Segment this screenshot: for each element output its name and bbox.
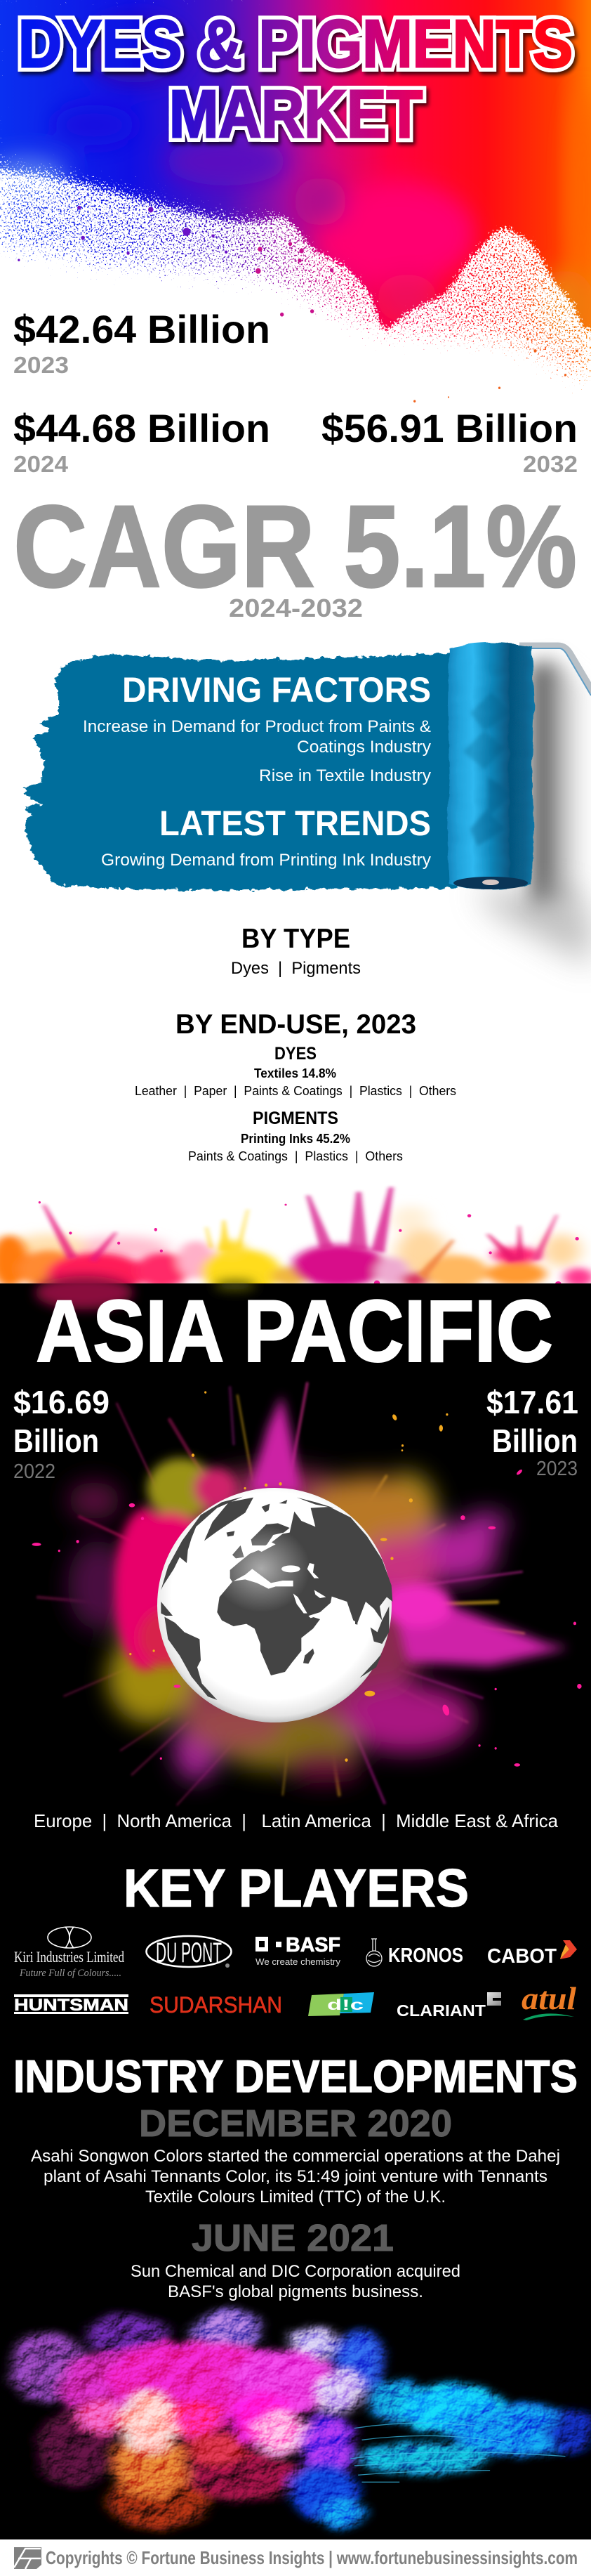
dyes segment [135,1044,456,1098]
pigments segment: Printing Inks 45.2% [241,1132,350,1146]
by end-use [135,1009,456,1163]
logo: Cabot [487,1940,577,1968]
driving factors list [83,717,431,785]
title [18,6,573,152]
stat: Asia Pacific 2023: $17.61 [486,1384,578,1420]
development: December 2020: plant of Asahi Tennants Color, its 51:49 joint venture with Tennants [44,2167,547,2186]
logo: Cabot: CABOT [487,1945,557,1968]
logo: BASF: We create chemistry [255,1956,340,1967]
heading: driving factors: DRIVING FACTORS [122,670,431,710]
stat: Asia Pacific 2022 [13,1384,109,1483]
pigments segment: PIGMENTS [253,1109,338,1128]
stat: 2023 market size: 2023 [13,352,69,378]
pigments segment: Paints & Coatings | Plastics | Others [188,1149,403,1163]
stat: Asia Pacific 2023 [486,1384,578,1480]
driving factors list: Coatings Industry [297,738,431,757]
top paint powder splash [0,0,591,403]
stat: 2024 market size: $44.68 Billion [13,406,270,450]
development: December 2020 [31,2103,560,2206]
development: June 2021 [131,2217,460,2301]
dyes segment: Leather | Paper | Paints & Coatings | Plastics | Others [135,1084,456,1098]
logo: Atul: atul [522,1980,576,2016]
development: June 2021: Sun Chemical and DIC Corporation acquired [131,2262,460,2281]
by type: BY TYPE [241,924,350,954]
development: June 2021: BASF's global pigments business. [168,2282,423,2301]
colour powder band [0,1187,591,1295]
stat: 2032 market size: $56.91 Billion [321,406,578,450]
splash behind globe [32,1383,582,1805]
stat: Asia Pacific 2023: Billion [492,1423,578,1459]
stat: Asia Pacific 2022: Billion [13,1423,99,1459]
dyes segment: DYES [274,1044,317,1064]
development: June 2021: JUNE 2021 [192,2217,394,2259]
by type [231,924,361,978]
logo: DIC [308,1992,374,2016]
panel: paint roller with driving factors and trends [22,642,591,966]
logo: Huntsman: HUNTSMAN [14,1996,128,2015]
title: MARKET [169,77,423,152]
pigments segment [188,1109,403,1163]
logo: DuPont [146,1936,232,1968]
logo: Kiri Industries [14,1927,124,1979]
paint brush stroke [22,653,456,890]
logo: Kronos [366,1939,463,1967]
logo: Kronos: KRONOS [388,1944,463,1967]
logo: Clariant: CLARIANT [397,2001,486,2020]
heading: key players: KEY PLAYERS [124,1859,469,1918]
logo: BASF: BASF [286,1934,340,1956]
logo: Sudarshan: SUDARSHAN [150,1992,282,2018]
regions list: Europe | North America | Latin America | Middle East & Africa [34,1810,559,1831]
development: December 2020: DECEMBER 2020 [139,2103,452,2145]
stat: 2032 market size [321,406,578,477]
icon: globe [157,1488,392,1722]
CAGR: 2024-2032 [229,594,363,622]
latest trends text: Growing Demand from Printing Ink Industry [101,851,431,870]
heading: latest trends: LATEST TRENDS [159,804,431,843]
driving factors list: Rise in Textile Industry [259,766,431,785]
by type: Dyes | Pigments [231,959,361,978]
powder bleed under band edge [35,1276,256,1309]
logo: Clariant [397,1992,501,2020]
stat: 2023 market size [13,307,270,378]
driving factors list: Increase in Demand for Product from Paints & [83,717,431,736]
ink smoke artwork [0,2299,591,2539]
logo: DIC: d!c [327,1997,364,2013]
by end-use: BY END-USE, 2023 [175,1009,416,1040]
stat: 2024 market size: 2024 [13,451,69,477]
stat: 2024 market size [13,406,270,477]
footer [0,2539,591,2576]
logo: BASF [255,1934,340,1967]
development: December 2020: Asahi Songwon Colors started the commercial operations at the Dahej [31,2147,560,2166]
logo: Kiri Industries: Future Full of Colours..... [19,1968,121,1979]
dyes segment: Textiles 14.8% [254,1066,336,1080]
roller handle [519,646,591,695]
stat: 2023 market size: $42.64 Billion [13,307,270,351]
stat: Asia Pacific 2022: 2022 [13,1460,55,1483]
stat: Asia Pacific 2023: 2023 [536,1458,578,1480]
development: December 2020: Textile Colours Limited (TTC) of the U.K. [145,2188,446,2206]
logo: Kiri Industries: Kiri Industries Limited [14,1948,124,1966]
icon: Fortune Business Insights logo [14,2547,41,2569]
title: MARKET [169,77,423,152]
roller body [447,642,534,890]
stat: Asia Pacific 2022: $16.69 [13,1384,109,1420]
logo: DuPont: DU PONT [156,1937,222,1968]
stat: 2032 market size: 2032 [523,451,578,477]
roller shadow [474,660,591,966]
black section background [0,1283,591,2539]
